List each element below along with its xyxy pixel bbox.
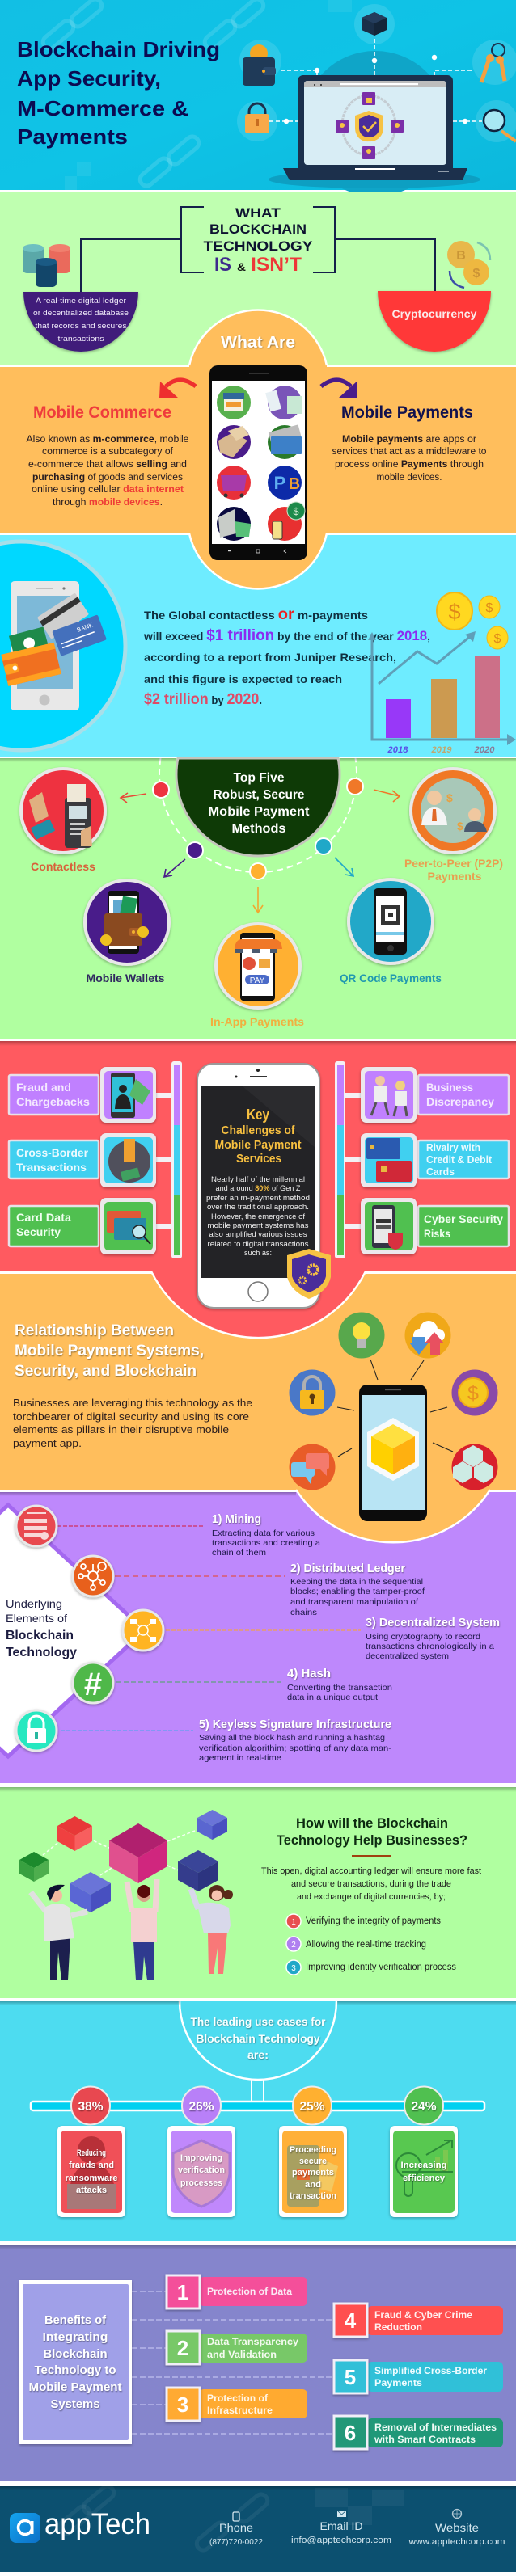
panel: what blockchain is and isn't: ISN’T [251, 254, 302, 276]
benefit 1: 1 [177, 2280, 188, 2304]
icon: dollar coin [451, 1369, 498, 1416]
challenge: rivalry with cards: Rivalry with [426, 1142, 480, 1153]
icon: padlock [290, 1369, 335, 1416]
connector lines [81, 239, 435, 292]
step 5: keyless signature infrastructure: Saving all the block hash and running a hashtag [199, 1733, 385, 1743]
benefit 4: 4 [345, 2308, 357, 2333]
step 3: decentralized system [366, 1616, 500, 1661]
heading box: Blockchain [44, 2347, 107, 2361]
icon: magnifier [484, 110, 516, 141]
text: challenges body: related to digital transactions [207, 1240, 309, 1249]
step 1: mining: chain of them [212, 1548, 266, 1558]
label [404, 858, 503, 883]
benefit 4: Fraud & Cyber Crime [374, 2309, 472, 2321]
benefit 2: 2 [177, 2336, 188, 2360]
text: mobile commerce definition: through mobile devices . [53, 498, 163, 508]
phone with commerce icons: P [274, 473, 285, 493]
text: contactless statistic: will exceed $1 trillion by the end of the year 2018, [143, 627, 430, 644]
benefit 2: Data Transparency [207, 2336, 298, 2347]
heading bracket [181, 207, 335, 272]
benefit list: Improving identity verification process [306, 1963, 456, 1972]
panel: how will blockchain help businesses [0, 1787, 516, 1998]
heading: TECHNOLOGY [204, 238, 313, 254]
text: relationship body: payment app. [13, 1437, 82, 1449]
use case: payments 25%: payments [292, 2168, 334, 2178]
heading: Mobile Payment Systems, [15, 1343, 204, 1360]
person middle [127, 1879, 157, 1980]
panel: top five payment methods [0, 758, 516, 1039]
step 2: distributed ledger: Keeping the data in the sequential [290, 1577, 423, 1587]
panel: header banner [0, 0, 516, 196]
text: mobile commerce definition: commerce is a subcategory of [42, 447, 174, 457]
benefit 2: and Validation [207, 2349, 277, 2360]
text: contactless statistic: according to a report from Juniper Research, [144, 651, 396, 664]
bowl: is [23, 292, 138, 352]
panel: what blockchain is and isn't: & [237, 260, 246, 273]
panel: underlying elements of blockchain technology [0, 1492, 516, 1783]
challenge: card data security: Card Data [16, 1212, 72, 1224]
challenge: card data security: Security [16, 1226, 61, 1238]
logo [10, 2507, 150, 2543]
heading: Blockchain [6, 1629, 74, 1642]
panel: footer [0, 2484, 516, 2572]
heading [204, 205, 313, 254]
challenge: fraud and chargebacks: Fraud and [16, 1081, 71, 1094]
icon: keyless signature lock [16, 1710, 57, 1751]
step 4: hash [287, 1667, 392, 1702]
heading circle: Robust, Secure [214, 788, 305, 802]
title: Payments [17, 124, 128, 149]
icon: hash [73, 1663, 113, 1703]
text: challenges body: However, the emergence of [211, 1212, 305, 1221]
heading: How will the Blockchain [296, 1815, 448, 1831]
benefit 6: with Smart Contracts [374, 2434, 476, 2445]
method: peer-to-peer [404, 769, 503, 883]
icon: coins: $ [473, 267, 480, 280]
illustration: phone with wallet and cards: BANK [76, 621, 94, 634]
text: ledger intro: and exchange of digital currencies, by; [297, 1892, 446, 1902]
heading [15, 1322, 204, 1380]
heading [6, 1597, 77, 1659]
heading circle: Top Five [233, 771, 285, 785]
icon: gold coins: $ [494, 632, 501, 646]
step 4: hash: Converting the transaction [287, 1683, 392, 1693]
challenge: cyber security risks: Risks [424, 1228, 450, 1240]
arrow: to mobile payments [321, 380, 357, 398]
step 2: distributed ledger [290, 1562, 425, 1617]
label: Payments [427, 871, 482, 883]
benefit 3: Protection of [207, 2393, 269, 2404]
benefit 5: Simplified Cross-Border [374, 2365, 487, 2376]
text: mobile commerce definition: online using cellular data internet [32, 485, 184, 495]
use case: payments 25%: and [305, 2180, 321, 2190]
panel: key challenges [0, 1041, 516, 1271]
icon: gold coins [437, 592, 508, 649]
challenge: cross-border transactions: Transactions [16, 1162, 87, 1174]
contact: email: Email ID [320, 2519, 362, 2532]
dashed orbit [159, 758, 357, 872]
panel: global m-payments statistic [0, 535, 516, 757]
heading: Relationship Between [15, 1322, 174, 1339]
contact: phone: (877)720-0022 [209, 2538, 263, 2547]
text: challenges body [206, 1175, 310, 1258]
step 4: hash: 4) Hash [287, 1667, 331, 1680]
bowl: is: A real-time digital ledger [36, 297, 126, 306]
logo: appTech [44, 2507, 150, 2540]
step 5: keyless signature infrastructure [199, 1718, 392, 1763]
contact: website: www.apptechcorp.com [408, 2537, 505, 2547]
icon: cube [362, 12, 387, 36]
phone with commerce icons [209, 365, 307, 560]
label: Contactless [31, 860, 95, 873]
benefit 3: 3 [177, 2393, 188, 2417]
challenge: cross-border transactions: Cross-Border [16, 1147, 89, 1159]
panel: mobile commerce and mobile payments [0, 367, 516, 533]
challenge: business discrepancy: Business [426, 1081, 473, 1094]
step 2: distributed ledger: blocks; enabling the tamper-proof [290, 1587, 425, 1596]
benefit 3 [167, 2388, 307, 2421]
challenge: card data security [9, 1198, 156, 1254]
heading: Technology [6, 1646, 77, 1659]
challenge: fraud and chargebacks: Chargebacks [16, 1096, 90, 1108]
icon: bulb [338, 1313, 385, 1358]
use case: payments 25% [279, 2087, 347, 2217]
benefit list: Verifying the integrity of payments [306, 1916, 441, 1926]
heading bowl: The leading use cases for [191, 2015, 326, 2028]
step 1: mining [212, 1512, 320, 1558]
bar chart: 2018 to 2020: 2019 [430, 745, 452, 755]
step 3: decentralized system: 3) Decentralized System [366, 1616, 500, 1629]
challenge: fraud and chargebacks [9, 1067, 156, 1123]
icon: decentralized system [123, 1610, 163, 1651]
heading box: Mobile Payment [29, 2380, 121, 2394]
challenge: cyber security risks [361, 1198, 509, 1254]
text: challenges body: over the traditional approach. [207, 1203, 309, 1212]
title: App Security, [17, 66, 161, 91]
icon: distributed ledger [73, 1556, 113, 1596]
dashed leaders [57, 1526, 361, 1731]
heading: what are: What Are [221, 334, 295, 352]
person right [191, 1885, 233, 1974]
bar chart: 2018 to 2020 [368, 631, 516, 755]
step 2: distributed ledger: and transparent manipulation of [290, 1597, 418, 1607]
dashed connectors [132, 2291, 333, 2434]
use case: verification 26%: verification [178, 2165, 225, 2175]
benefit 6: Removal of Intermediates [374, 2422, 497, 2433]
benefit 5: Payments [374, 2377, 422, 2388]
phone with commerce icons: $ [293, 505, 299, 517]
heading bowl [180, 2001, 336, 2080]
section edge shadows [0, 758, 516, 2490]
use case: efficiency 24% [390, 2087, 458, 2217]
text: contactless statistic: and this figure is expected to reach [144, 672, 342, 685]
use case: payments 25%: transaction [290, 2191, 336, 2201]
panel: benefits of integrating blockchain [0, 2245, 516, 2481]
step 1: mining: Extracting data for various [212, 1528, 315, 1538]
icon: cloud [404, 1313, 451, 1358]
icon: mining [16, 1506, 57, 1546]
text: mobile payments definition: process online Payments through [335, 460, 484, 470]
phone with commerce icons: B [289, 475, 300, 493]
step 3: decentralized system: Using cryptography to record [366, 1632, 480, 1642]
benefit 1: Protection of Data [207, 2286, 292, 2297]
heading box: Benefits of [44, 2313, 107, 2327]
text: relationship body [13, 1397, 252, 1449]
icon: database stacks [23, 244, 70, 287]
challenge: rivalry with cards: Credit & Debit [426, 1154, 493, 1166]
icon: wallet [243, 44, 276, 86]
benefit list: 1 [291, 1918, 296, 1927]
text: challenges body: Nearly half of the millennial [211, 1175, 305, 1184]
benefit list: 2 [291, 1941, 296, 1950]
panel: what blockchain is and isn't [0, 192, 516, 365]
use case: frauds 38% [57, 2087, 125, 2217]
text: mobile commerce definition [26, 435, 189, 508]
use case: payments 25%: Proceeding [290, 2145, 336, 2155]
text: challenges body: mobile payment systems has [207, 1221, 309, 1230]
step 5: keyless signature infrastructure: verification algorithim; spotting of any data man- [199, 1743, 392, 1753]
text: relationship body: Businesses are leveraging this technology as the [13, 1397, 252, 1409]
heading: Technology Help Businesses? [277, 1832, 467, 1848]
illustration: laptop with blockchain shield [237, 4, 516, 196]
benefit list [286, 1914, 456, 1975]
icon: chat bubbles [290, 1444, 335, 1490]
bowl: isn't: Cryptocurrency [391, 307, 477, 320]
benefit 4 [334, 2304, 503, 2337]
benefit 5: 5 [345, 2365, 356, 2389]
use case: frauds 38%: 38% [78, 2100, 104, 2114]
heading: key challenges: Services [236, 1153, 281, 1166]
text: contactless statistic [143, 606, 430, 708]
text: mobile commerce definition: Also known as m-commerce , mobile [26, 435, 189, 445]
icon: block cubes [451, 1444, 498, 1490]
benefit 5 [334, 2360, 503, 2393]
text: mobile commerce definition: purchasing of goods and services [32, 473, 183, 483]
step 1: mining: transactions and creating a [212, 1538, 320, 1548]
icon: gold coins: $ [486, 601, 493, 615]
heading: mobile payments: Mobile Payments [341, 403, 473, 422]
challenge: cyber security risks: Cyber Security [424, 1213, 503, 1225]
text: mobile payments definition: mobile devices. [377, 473, 442, 483]
benefit list: 3 [291, 1964, 296, 1973]
step 3: decentralized system: transactions chronologically in a [366, 1642, 494, 1651]
text: contactless statistic: The Global contactless or m-payments [144, 606, 368, 623]
text: ledger intro [261, 1866, 481, 1902]
challenge: rivalry with cards: Cards [426, 1166, 455, 1178]
heading circle: Mobile Payment [209, 805, 309, 819]
heading [277, 1815, 467, 1848]
text: contactless statistic: $2 trillion by 2020. [144, 691, 262, 708]
contact: website [408, 2509, 505, 2547]
use case: payments 25%: secure [299, 2157, 327, 2166]
icon: keys [481, 44, 505, 82]
challenge: rivalry with cards [361, 1133, 509, 1187]
text: mobile payments definition: services that act as a middleware to [332, 447, 487, 457]
text: challenges body: such as: [244, 1249, 272, 1258]
contact: phone [209, 2512, 263, 2547]
title: Blockchain Driving [17, 37, 220, 61]
label: Peer-to-Peer (P2P) [404, 858, 503, 870]
orbit dots [153, 778, 363, 879]
benefit 1 [167, 2275, 307, 2308]
heading: key challenges: Key [247, 1107, 269, 1123]
text: relationship body: torchbearer of digital security and using its core [13, 1410, 249, 1423]
use case: verification 26%: processes [180, 2178, 222, 2188]
illustration: people lifting blocks [19, 1810, 233, 1980]
method: in-app [210, 924, 304, 1028]
shape: red bowl with key challenges phone [151, 1064, 366, 1338]
text: mobile commerce definition: e-commerce that allows selling and [28, 460, 187, 470]
heading: BLOCKCHAIN [209, 221, 307, 237]
benefit 3: Infrastructure [207, 2405, 273, 2416]
panel: relationship between payments, security and blockchain [0, 1274, 516, 1490]
use case: efficiency 24%: Increasing [401, 2161, 446, 2170]
shape: what are dome with phone [159, 310, 357, 588]
illustration: phone with wallet and cards [0, 542, 125, 750]
label: Mobile Wallets [86, 972, 165, 984]
bowl: is: that records and secures [36, 322, 127, 331]
icon: gear shield [287, 1249, 331, 1299]
heading: Underlying [6, 1597, 62, 1610]
heading: key challenges: Challenges of [222, 1124, 295, 1137]
challenge: business discrepancy [361, 1067, 509, 1123]
person left [31, 1885, 87, 1980]
method: peer-to-peer: $ [457, 820, 463, 833]
benefit 6: 6 [345, 2421, 356, 2445]
benefit 2 [167, 2331, 307, 2364]
icon: coins: B [456, 249, 466, 263]
panel: what blockchain is and isn't: IS [214, 254, 231, 276]
contact: email [291, 2511, 391, 2545]
text: ledger intro: and secure transactions, during the trade [291, 1879, 451, 1889]
side progress bars [156, 1061, 361, 1258]
use case: efficiency 24%: efficiency [403, 2173, 446, 2183]
use case: verification 26%: Improving [180, 2153, 222, 2163]
step 2: distributed ledger: 2) Distributed Ledger [290, 1562, 405, 1575]
bar chart: 2018 to 2020: 2018 [387, 745, 408, 755]
use case: verification 26% [167, 2087, 235, 2217]
label: QR Code Payments [340, 972, 442, 984]
heading: mobile commerce: Mobile Commerce [33, 403, 171, 422]
bowl: is: or decentralized database [33, 309, 129, 318]
use case: frauds 38%: ransomware [65, 2173, 118, 2183]
method: mobile wallets [85, 880, 169, 984]
phone with block [359, 1385, 427, 1521]
bowl: isn't [378, 291, 491, 352]
title [17, 37, 220, 149]
bar chart: 2018 to 2020: 2020 [473, 745, 495, 755]
title: M-Commerce & [17, 96, 188, 120]
text: challenges body: and around 80% of Gen Z [215, 1184, 301, 1193]
icon: dollar coin: $ [467, 1382, 479, 1405]
step 3: decentralized system: decentralized system [366, 1651, 449, 1661]
use case: frauds 38%: attacks [76, 2186, 107, 2195]
contact: website: Website [435, 2521, 479, 2534]
use case: efficiency 24%: 24% [411, 2100, 437, 2114]
use case: payments 25%: 25% [299, 2100, 325, 2114]
bowl: is: transactions [58, 335, 104, 344]
heading bowl: are: [247, 2048, 269, 2061]
text: mobile payments definition: Mobile payments are apps or [342, 435, 476, 445]
heading: key challenges [215, 1107, 302, 1166]
heading circle: Methods [231, 822, 286, 836]
heading: Elements of [6, 1612, 67, 1625]
challenge: cross-border transactions [9, 1133, 156, 1187]
arrow: to mobile commerce [159, 380, 196, 398]
use case: frauds 38%: frauds and [69, 2161, 114, 2170]
text: challenges body: prefer an m-payment method [206, 1194, 310, 1203]
heading: Security, and Blockchain [15, 1363, 197, 1380]
heading box: Technology to [34, 2363, 116, 2377]
shape: orange bowl with blockchain phone diagram [290, 1313, 498, 1542]
arrows [121, 790, 400, 913]
heading: WHAT [235, 205, 281, 221]
icon: hash: # [84, 1667, 102, 1702]
text: ledger intro: This open, digital accounting ledger will ensure more fast [261, 1866, 481, 1876]
icon: gold coins: $ [448, 600, 461, 624]
step 2: distributed ledger: chains [290, 1608, 317, 1617]
heading box: Systems [50, 2397, 100, 2411]
contact: email: info@apptechcorp.com [291, 2536, 391, 2545]
icon: coins [447, 241, 490, 288]
connector stem and timeline bar [31, 2080, 484, 2110]
use case: verification 26%: 26% [189, 2100, 214, 2114]
heading box: Integrating [42, 2330, 108, 2344]
heading box [19, 2280, 132, 2444]
step 4: hash: data in a unique output [287, 1693, 378, 1702]
method: contactless [21, 769, 105, 873]
benefit list: Allowing the real-time tracking [306, 1940, 426, 1950]
benefit 4: Reduction [374, 2321, 422, 2333]
method: qr code [340, 879, 442, 984]
diamond [0, 1505, 145, 1756]
panel: leading use cases [0, 2001, 516, 2241]
icon: padlock [245, 103, 269, 133]
heading bowl: Blockchain Technology [196, 2032, 320, 2045]
method: in-app: PAY [250, 976, 265, 985]
challenge: business discrepancy: Discrepancy [426, 1096, 495, 1108]
step 1: mining: 1) Mining [212, 1512, 261, 1526]
step 5: keyless signature infrastructure: agement in real-time [199, 1753, 281, 1763]
use case: frauds 38%: Reducing [77, 2148, 106, 2158]
step 5: keyless signature infrastructure: 5) Keyless Signature Infrastructure [199, 1718, 391, 1731]
text: challenges body: also amplified various issues [209, 1230, 307, 1239]
heading circle [176, 758, 340, 856]
benefit 6 [334, 2416, 503, 2449]
contact: phone: Phone [219, 2521, 253, 2534]
text: relationship body: elements as pillars in their disruptive mobile [13, 1423, 229, 1436]
method: peer-to-peer: $ [446, 791, 453, 804]
label: In-App Payments [210, 1015, 304, 1028]
text: mobile payments definition [332, 435, 487, 483]
heading: key challenges: Mobile Payment [215, 1139, 302, 1152]
